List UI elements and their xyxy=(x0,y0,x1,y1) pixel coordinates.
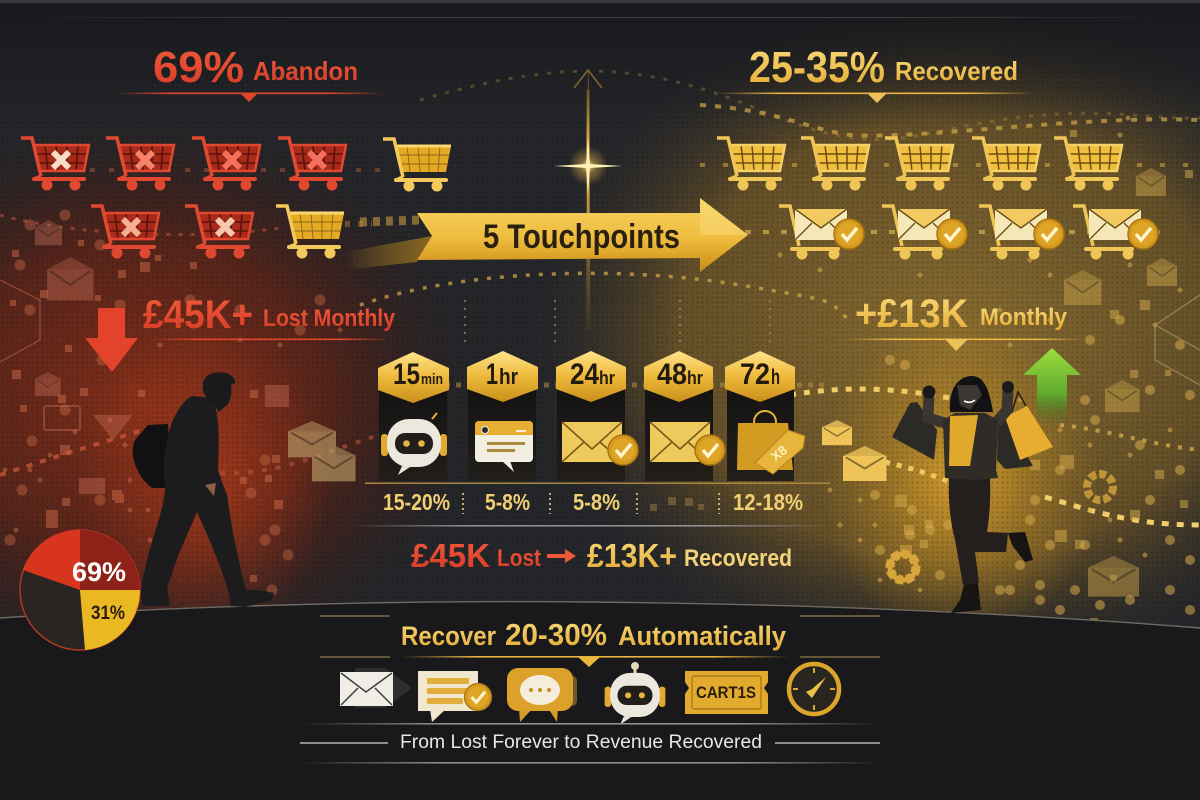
touchpoints arrow: 5 Touchpoints xyxy=(483,218,680,256)
step 15 min: min xyxy=(421,371,443,388)
step 72 h: X8 xyxy=(768,442,790,464)
step 24 hr xyxy=(556,351,638,481)
gain monthly callout: Monthly xyxy=(980,304,1068,331)
gears xyxy=(890,474,1113,580)
step 15 min: 15 xyxy=(393,358,420,391)
heading: 69% abandon: 69% xyxy=(153,43,244,92)
mid envelopes xyxy=(288,421,356,481)
woman celebrating xyxy=(892,376,1053,613)
icon: coupon: CART1S xyxy=(696,683,756,702)
step 72 h xyxy=(725,351,805,481)
recovery rates: 5-8% xyxy=(485,489,530,515)
jacket xyxy=(943,413,998,480)
step 48 hr: hr xyxy=(687,368,703,388)
pie chart xyxy=(20,530,140,650)
recovered carts xyxy=(717,138,1122,190)
step 24 hr: hr xyxy=(599,368,615,388)
left shopping bag xyxy=(892,402,937,460)
heading: 69% abandon xyxy=(115,43,385,102)
red down arrow xyxy=(85,308,138,372)
recovery rates: 5-8% xyxy=(573,489,620,515)
head and hair xyxy=(950,376,993,412)
recovered email carts xyxy=(779,206,1158,260)
step 48 hr: 48 xyxy=(657,358,687,391)
heading: 25-35% recovered: Recovered xyxy=(895,56,1018,86)
step 1 hr: 1 xyxy=(486,358,498,391)
gain monthly callout xyxy=(845,292,1085,351)
fists xyxy=(922,386,936,398)
abandoned carts xyxy=(21,138,346,258)
cart 5 xyxy=(91,206,159,258)
cart 2 xyxy=(106,138,174,190)
icon: clock xyxy=(789,664,839,714)
man walking away xyxy=(133,372,274,607)
icon: chat xyxy=(507,668,577,722)
pie chart: 69% xyxy=(72,557,126,587)
step 1 hr xyxy=(467,351,538,481)
step 48 hr xyxy=(644,351,725,481)
result line: Lost xyxy=(497,545,541,572)
pie chart: 31% xyxy=(91,603,125,624)
step 72 h: h xyxy=(771,366,780,389)
right shopping bags xyxy=(997,392,1053,469)
cart 1 xyxy=(21,138,89,190)
flying envelopes xyxy=(822,420,886,481)
recover automatically headline xyxy=(400,617,790,667)
result line: Recovered xyxy=(684,545,792,572)
step 1 hr: hr xyxy=(499,364,518,389)
result line xyxy=(411,537,792,574)
lost monthly callout: Lost Monthly xyxy=(263,305,396,332)
faded background icons: left envelopes xyxy=(35,220,289,494)
lost monthly callout xyxy=(143,293,396,340)
tagline: From Lost Forever to Revenue Recovered xyxy=(400,732,762,753)
faded background icons: right envelopes xyxy=(1064,168,1177,597)
step 24 hr: 24 xyxy=(570,358,599,391)
cart 3 xyxy=(192,138,260,190)
result line: £13K+ xyxy=(587,537,677,574)
gain monthly callout: +£13K xyxy=(855,292,968,336)
floor xyxy=(0,602,1200,800)
cart 6 xyxy=(185,206,253,258)
heading: 25-35% recovered xyxy=(715,43,1035,103)
recover automatically headline: Recover xyxy=(401,621,496,651)
heading: 25-35% recovered: 25-35% xyxy=(749,43,885,92)
yellow top xyxy=(949,415,978,466)
icon: message xyxy=(418,671,492,722)
heading: 69% abandon: Abandon xyxy=(253,56,358,86)
icon: envelope xyxy=(340,668,412,708)
geometric outlines xyxy=(0,280,1200,785)
bottom icon row xyxy=(340,662,839,724)
step 15 min xyxy=(378,352,449,481)
legs xyxy=(949,478,1008,585)
timeline xyxy=(365,351,830,515)
arms xyxy=(928,390,1008,423)
touchpoints arrow xyxy=(345,198,748,272)
dotted flow paths xyxy=(0,71,1200,525)
cart 4 xyxy=(278,138,346,190)
centre spine xyxy=(554,70,622,330)
recovery rates: 12-18% xyxy=(733,489,803,515)
recovery rates: 15-20% xyxy=(383,489,450,515)
lost monthly callout: £45K+ xyxy=(143,293,253,337)
recovery rates xyxy=(383,489,803,515)
recover automatically headline: Automatically xyxy=(618,621,786,651)
result line: £45K xyxy=(411,537,490,574)
recover automatically headline: 20-30% xyxy=(505,617,607,652)
icon: coupon xyxy=(685,671,768,714)
floor highlight xyxy=(0,602,1200,628)
heels xyxy=(951,532,1033,613)
icon: robot xyxy=(605,662,665,724)
step 72 h: 72 xyxy=(740,358,770,391)
green up arrow xyxy=(1023,348,1081,425)
saved yellow carts xyxy=(276,139,451,258)
